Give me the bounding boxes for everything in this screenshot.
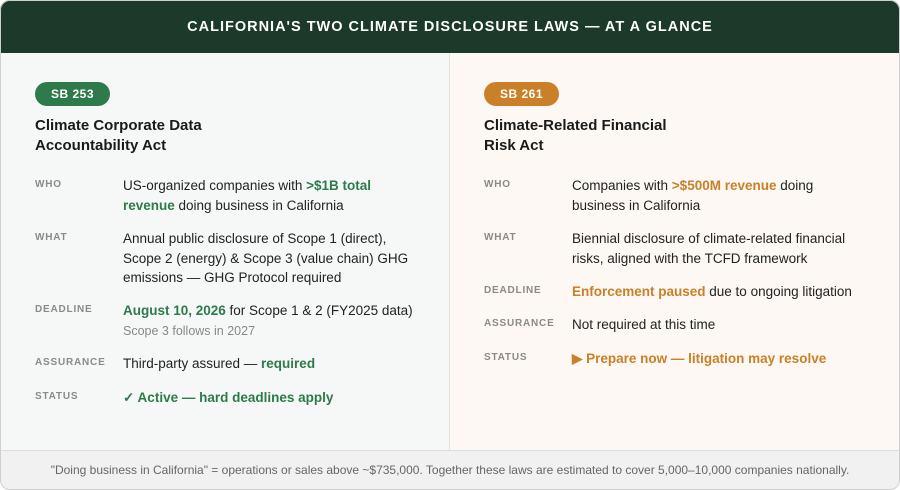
title: CALIFORNIA'S TWO CLIMATE DISCLOSURE LAWS — AT A GLANCE [187,19,713,35]
row: deadline: Scope 3 follows in 2027 [123,324,255,338]
row: assurance [484,317,715,332]
row: assurance: ASSURANCE [35,357,106,368]
footer note [0,450,900,490]
panel: SB 261 [450,53,900,450]
row: who: US-organized companies with >$1B total revenue doing business in California [123,178,371,212]
row: status: STATUS [484,352,527,363]
row: status: STATUS [35,391,78,402]
row: assurance: Not required at this time [572,317,715,332]
row: assurance: Third-party assured — required [123,356,315,371]
row: deadline: DEADLINE [35,304,93,315]
row: deadline: DEADLINE [484,285,542,296]
row: who: WHO [35,179,62,190]
row: status: ▶ Prepare now — litigation may resolve [572,351,826,366]
row: status: ✓ Active — hard deadlines apply [123,390,333,405]
heading: SB 261: Climate-Related Financial [484,117,667,134]
pill: SB 253 [35,82,110,106]
row: what: Biennial disclosure of climate-related financial risks, aligned with the TCFD framework [572,231,845,266]
heading: SB 261: Risk Act [484,137,543,154]
heading: SB 253: Accountability Act [35,137,166,154]
row: what: Annual public disclosure of Scope 1 (direct), Scope 2 (energy) & Scope 3 (value chain) GHG emissions — GHG Protocol required [123,231,408,285]
heading: SB 261 [484,117,667,154]
pill: SB 261 [484,82,559,106]
pill: SB 253: SB 253 [51,87,94,101]
heading: SB 253 [35,117,202,154]
row: assurance [35,356,315,371]
row: what: WHAT [484,232,516,243]
panel: SB 253 [0,53,450,450]
row: deadline: August 10, 2026 for Scope 1 & 2 (FY2025 data) [123,303,413,318]
footer note: "Doing business in California" = operations or sales above ~$735,000. Together these laws are estimated to cover 5,000–10,000 companies nationally. [51,463,849,477]
row: deadline [35,303,413,338]
row: deadline: Enforcement paused due to ongoing litigation [572,284,852,299]
pill: SB 261: SB 261 [500,87,543,101]
heading: SB 253: Climate Corporate Data [35,117,202,134]
row: what: WHAT [35,232,67,243]
row: who: Companies with >$500M revenue doing business in California [572,178,813,212]
row: who: WHO [484,179,511,190]
row: assurance: ASSURANCE [484,318,555,329]
title [0,0,900,53]
